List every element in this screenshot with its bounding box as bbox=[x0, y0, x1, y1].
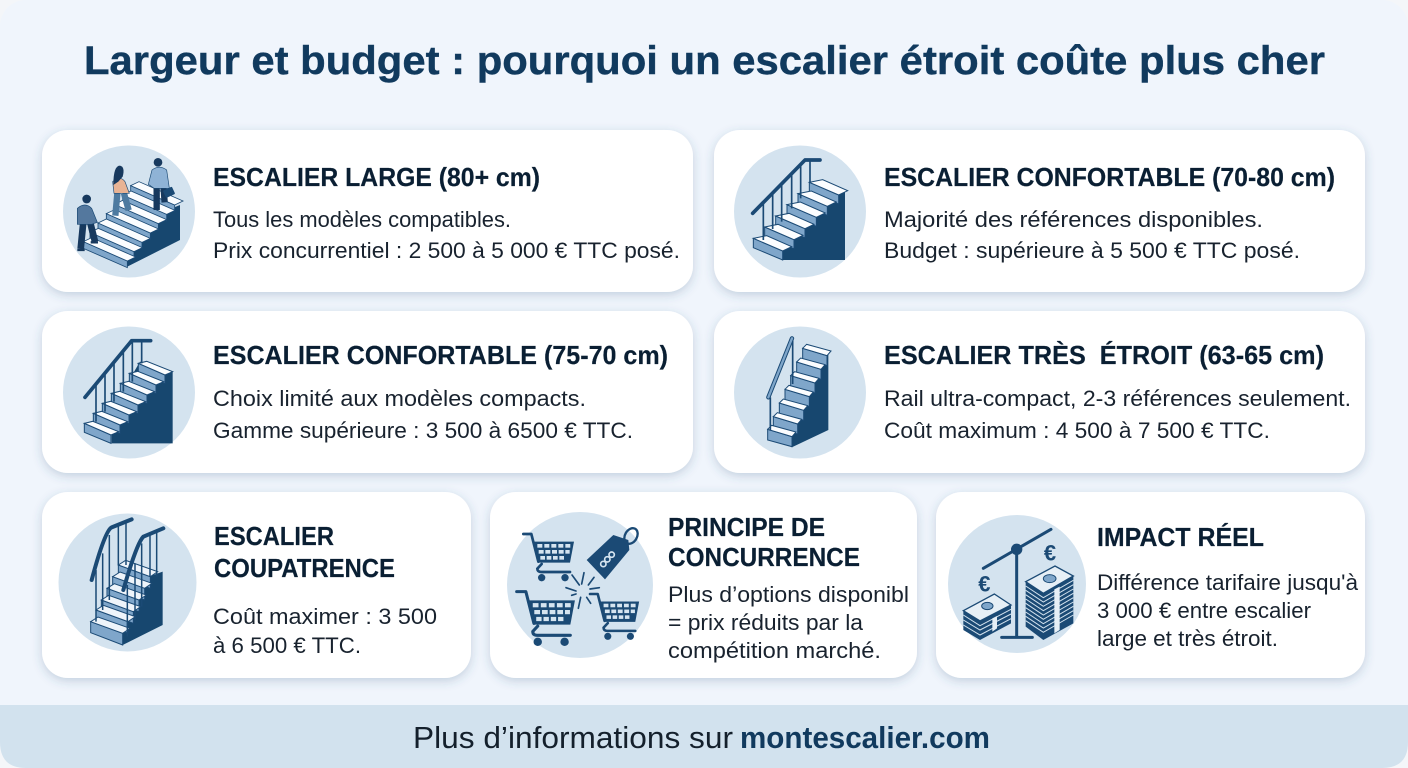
text: line 1: Différence tarifaire jusqu'à bbox=[1097, 570, 1359, 595]
icon: wide stairs with three people bbox=[63, 146, 195, 278]
heading: PRINCIPE DE bbox=[668, 512, 825, 542]
panel: principe de concurrence bbox=[490, 492, 917, 678]
panel: escalier large bbox=[42, 130, 693, 292]
heading line 2: COUPATRENCE bbox=[214, 553, 395, 583]
icon: balance with money stacks: € bbox=[978, 571, 990, 596]
icon: shopping carts and price tag bbox=[507, 512, 653, 658]
text: line 1: Majorité des références disponibles. bbox=[884, 207, 1263, 232]
panel: escalier confortable 70-80 bbox=[714, 130, 1365, 292]
footer band bbox=[0, 705, 1408, 768]
heading line 2: CONCURRENCE bbox=[668, 542, 860, 572]
text: line 2: Prix concurrentiel : 2 500 à 5 000 € TTC posé. bbox=[213, 238, 680, 263]
text: line 2: à 6 500 € TTC. bbox=[213, 633, 361, 658]
panel: escalier très étroit bbox=[714, 311, 1365, 473]
text: line 2: Budget : supérieure à 5 500 € TTC posé. bbox=[884, 238, 1300, 263]
text: line 2: Coût maximum : 4 500 à 7 500 € TTC. bbox=[884, 418, 1270, 443]
text: line 1: Coût maximer : 3 500 bbox=[213, 604, 437, 629]
title: Largeur et budget : pourquoi un escalier étroit coûte plus cher bbox=[84, 39, 1325, 83]
heading: ESCALIER CONFORTABLE (75-70 cm) bbox=[213, 340, 668, 370]
text: line 3: large et très étroit. bbox=[1097, 626, 1278, 651]
heading: ESCALIER CONFORTABLE (70-80 cm) bbox=[884, 162, 1335, 192]
icon: balance with money stacks: € bbox=[1044, 541, 1056, 566]
text: line 1: Plus d’options disponibl bbox=[668, 582, 909, 607]
text: line 1: Rail ultra-compact, 2-3 références seulement. bbox=[884, 386, 1351, 411]
panel: escalier confortable 75-70 bbox=[42, 311, 693, 473]
icon: compact stairs with railing bbox=[63, 326, 195, 458]
footer text: Plus d’informations sur bbox=[413, 720, 733, 755]
heading: ESCALIER bbox=[214, 521, 334, 551]
heading: ESCALIER TRÈS ÉTROIT (63-65 cm) bbox=[884, 340, 1324, 370]
heading: ESCALIER LARGE (80+ cm) bbox=[213, 162, 540, 192]
panel: impact réel bbox=[936, 492, 1365, 678]
text: line 2: = prix réduits par la bbox=[668, 610, 864, 635]
footer link: montescalier.com bbox=[740, 720, 990, 755]
icon: stairs with two railings bbox=[58, 514, 196, 652]
text: line 2: Gamme supérieure : 3 500 à 6500 € TTC. bbox=[213, 418, 633, 443]
text: line 1: Choix limité aux modèles compacts. bbox=[213, 386, 586, 411]
text: line 1: Tous les modèles compatibles. bbox=[213, 207, 511, 232]
icon: very narrow stairs bbox=[734, 326, 866, 458]
text: line 2: 3 000 € entre escalier bbox=[1097, 598, 1311, 623]
panel: escalier coupatrence bbox=[42, 492, 471, 678]
icon: stairs with railing bbox=[734, 146, 866, 278]
text: line 3: compétition marché. bbox=[668, 638, 881, 663]
heading: IMPACT RÉEL bbox=[1097, 522, 1264, 552]
icon: balance with money stacks bbox=[948, 515, 1086, 653]
